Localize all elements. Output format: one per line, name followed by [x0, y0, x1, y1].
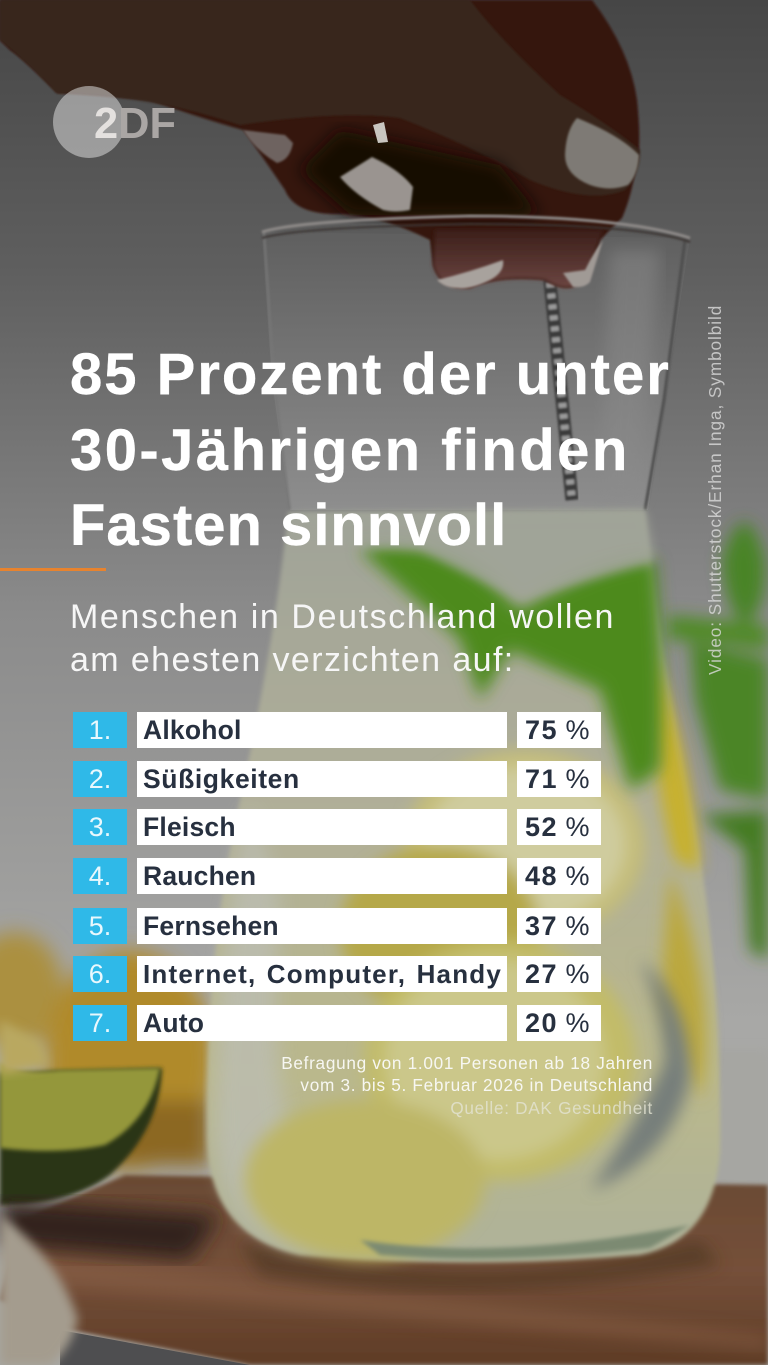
vertical image credit: Video: Shutterstock/Erhan Inga, Symbolbild: [705, 305, 725, 675]
row 5: Fernsehen: [73, 908, 601, 944]
lime wedge: [0, 1020, 162, 1205]
title: 30-Jährigen finden: [70, 418, 630, 483]
row 1: Alkohol: 75 %: [525, 715, 590, 745]
carafe upper glass: [262, 232, 690, 510]
table surface right: [700, 1050, 768, 1200]
title: Fasten sinnvoll: [70, 493, 507, 558]
ranking table: [73, 712, 601, 1041]
mint leaves right: [668, 522, 768, 960]
row 2: Süßigkeiten: [73, 761, 601, 797]
logo: ZDF: 2DF: [94, 99, 176, 148]
lemons left: [0, 932, 215, 1170]
subtitle: Menschen in Deutschland wollen: [70, 598, 615, 636]
dark table front: [60, 1330, 250, 1365]
row 7: Auto: 7.: [89, 1008, 111, 1038]
survey note and source: Befragung von 1.001 Personen ab 18 Jahren: [281, 1053, 653, 1073]
row 1: Alkohol: Alkohol: [143, 715, 242, 745]
row 4: Rauchen: 4.: [89, 861, 111, 891]
title: 85 Prozent der unter: [70, 342, 671, 407]
subtitle: am ehesten verzichten auf:: [70, 641, 515, 679]
row 2: Süßigkeiten: 71 %: [525, 764, 590, 794]
row 6: Internet, Computer, Handy: Internet, Computer, Handy: [143, 959, 502, 989]
stirring spoon: [541, 55, 575, 500]
subtitle: [70, 598, 615, 679]
carafe water body: [207, 510, 720, 1262]
lemon slices in water: [245, 650, 706, 1260]
row 4: Rauchen: Rauchen: [143, 861, 256, 891]
row 3: Fleisch: 3.: [89, 812, 111, 842]
survey note and source: Quelle: DAK Gesundheit: [450, 1098, 653, 1118]
row 6: Internet, Computer, Handy: [73, 956, 601, 992]
row 5: Fernsehen: 37 %: [525, 911, 590, 941]
fingernails: [565, 118, 639, 188]
row 6: Internet, Computer, Handy: 6.: [89, 959, 111, 989]
row 5: Fernsehen: 5.: [89, 911, 111, 941]
blurred foreground shape bottom left: [0, 1215, 78, 1365]
cutting board: [0, 1175, 768, 1365]
orange accent line: [0, 568, 106, 571]
hand: [0, 0, 640, 288]
row 3: Fleisch: [73, 809, 601, 845]
row 1: Alkohol: [73, 712, 601, 748]
row 4: Rauchen: [73, 858, 601, 894]
row 2: Süßigkeiten: 2.: [89, 764, 111, 794]
survey note and source: [281, 1053, 653, 1118]
row 7: Auto: [73, 1005, 601, 1041]
row 7: Auto: 20 %: [525, 1008, 590, 1038]
carafe rim: [262, 216, 690, 238]
row 3: Fleisch: Fleisch: [143, 812, 236, 842]
row 1: Alkohol: 1.: [89, 715, 111, 745]
row 7: Auto: Auto: [143, 1008, 204, 1038]
row 6: Internet, Computer, Handy: 27 %: [525, 959, 590, 989]
row 5: Fernsehen: Fernsehen: [143, 911, 279, 941]
logo: ZDF: [53, 86, 176, 158]
mint in water: [360, 545, 662, 790]
row 3: Fleisch: 52 %: [525, 812, 590, 842]
title: [70, 342, 671, 558]
row 2: Süßigkeiten: Süßigkeiten: [143, 764, 300, 794]
survey note and source: vom 3. bis 5. Februar 2026 in Deutschland: [300, 1075, 653, 1095]
row 4: Rauchen: 48 %: [525, 861, 590, 891]
